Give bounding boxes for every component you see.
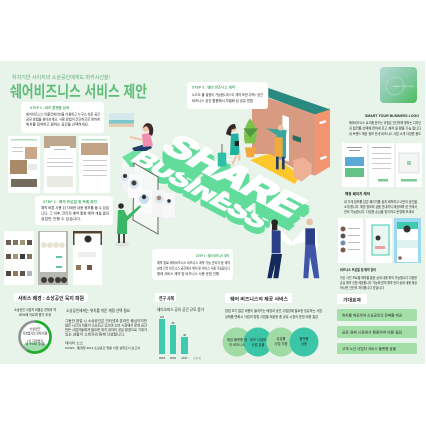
- phone screens: step 1: [8, 136, 110, 193]
- effect row 1: [337, 309, 417, 321]
- venn circles: 사업 효율: [251, 342, 265, 347]
- text block: background analysis: 많은 시간과 비용이 소요되고 있으며 소비 시장에서 운영 공간: [65, 322, 147, 328]
- venn circles: 매장 플랫폼 쉐: [227, 337, 247, 342]
- extruded wordmark: SHARE BUSINESS: BUSINESS: [126, 151, 275, 236]
- callout: step 2: [35, 196, 113, 225]
- logo card: [380, 67, 417, 103]
- callout: step 2: 니다. 그 이후, 관리자 예약 통한 예약 개설 결과: [41, 210, 110, 216]
- text: provided services description: [225, 308, 322, 319]
- bar chart: 48: [183, 334, 186, 337]
- callout: step 1: [21, 102, 104, 133]
- bar chart: 2019: [159, 356, 166, 360]
- image: beach photo: [109, 113, 134, 127]
- callout: step 1: 위치를 검색하고 원하는 공간을 선택하세요.: [26, 122, 89, 126]
- venn circles: 공유를: [276, 336, 286, 341]
- bar chart: 103: [160, 316, 165, 319]
- heading chip: expected effect: 기대효과: [343, 296, 362, 304]
- text block: background analysis: 소상공인에게는 위치를 쉬운 계정 선택 필요: [66, 308, 130, 313]
- cube under wordmark: [122, 147, 162, 200]
- donut chart: [14, 307, 56, 353]
- extruded wordmark: SHARE BUSINESS: SHARE: [154, 139, 314, 232]
- venn circles: 어 비즈니스: [229, 342, 245, 347]
- callout: step 1: 공유 방법을 찾아보세요. 사용 방법이 간단하므로 편하게: [26, 116, 100, 122]
- heading chip: case study: 연구 사례: [159, 295, 174, 302]
- illustration: traveller with suitcase: [218, 124, 240, 167]
- illustration: potted plant: [243, 118, 258, 157]
- text: shop page description: 관리 가능합니다. 다양한 손님을 맞이하고 운영해 보세요: [344, 209, 414, 214]
- illustration: shop building: [250, 88, 330, 184]
- effect row 3: 고객 노선 사업자 서비스 플랫폼 효율: [342, 346, 397, 351]
- donut chart: 자영업자의 전체 비중: [22, 330, 48, 336]
- bar chart: 2017: [181, 356, 188, 360]
- callout: step 2: 예약 버튼 사용 뒤 자세한 내용 정보를 볼 수 있습: [41, 205, 110, 210]
- subtitle: 위치기반 사이지의 소상공인에게도 마카시선을!: [12, 74, 110, 81]
- text block: background analysis: 만든 사업자들에게 필요한 위치 데이터 공유 환경으로 기대가: [65, 327, 147, 332]
- callout: step 3: 노드도 물 설정이 가능합니다! 이 계약 또한 주택 / 공간: [192, 92, 264, 97]
- bar chart: [157, 307, 204, 360]
- illustration: barista: [266, 125, 287, 169]
- effect row 1: 위치를 제공하여 소상공인의 판매를 제공: [342, 312, 403, 318]
- callout: step 1: 쉐어비즈니스 어플리케이션을 이용하고 누구나 쉬운 공간: [26, 112, 101, 116]
- callout: step 1: STEP 1 : 비즈 플랫폼 검색: [30, 105, 69, 110]
- callout: step 4: STEP 4 : 쉐어 비즈니스 계약: [196, 253, 230, 258]
- donut chart: 1인 자영업자: [27, 338, 43, 343]
- callout: step 4: [152, 249, 233, 280]
- text block: background analysis: 데이터 소스: [65, 340, 83, 345]
- heading chip: case study: [155, 293, 176, 302]
- text: shop page description: 내 가게 정보를 담은 페이지를 쉽게 제작하고 나만의 공간을: [344, 199, 417, 204]
- heading: smart your business logo: SMART YOUR BUSINESS LOGO: [365, 114, 419, 118]
- text: logo description: 과 컬러를 선택해 편하게 로고 제작 및 활용 가능 합니다: [349, 126, 422, 130]
- bar chart: 2018: [170, 356, 177, 360]
- text: shop page description: 소개 합니다. 매장 정보와 상품 안내까지 제공하며 한 곳에서: [344, 204, 417, 209]
- heading chip: service background: [14, 293, 88, 302]
- callout: step 2: STEP 2 : 예약 프로필 및 목록 확인: [43, 199, 97, 204]
- illustration: phone with profile cards: [121, 163, 175, 234]
- phone screens: shop page: [338, 218, 421, 263]
- donut chart: 약 74% 수준: [25, 341, 45, 346]
- text: profile description: [340, 275, 417, 290]
- heading: shop page: 매장 페이지 제작: [345, 191, 371, 196]
- heading chip: expected effect: [337, 294, 367, 304]
- extruded wordmark: SHARE BUSINESS: BUSINESS: [126, 153, 275, 238]
- extruded wordmark: SHARE BUSINESS: SHARE: [154, 137, 314, 230]
- phone screens: step 2: [4, 231, 102, 285]
- phone screens: logo maker: [342, 143, 422, 187]
- effect row 3: [337, 343, 417, 354]
- text: provided services description: 창업 초기 많은 비용이 들어가는 매장과 공간 사업장에 필요한 공유하는 사업: [225, 308, 322, 313]
- extruded wordmark: SHARE BUSINESS: [126, 129, 314, 238]
- callout: step 3: 비즈니스 공간 활용해서 차별화 된 공유 방법: [192, 98, 253, 103]
- extruded wordmark: SHARE BUSINESS: BUSINESS: [126, 147, 275, 232]
- extruded wordmark: SHARE BUSINESS: BUSINESS: [126, 149, 275, 234]
- heading: profile and reservation: 비즈니스 프로필 및 예약 관리: [340, 267, 376, 272]
- text block: background analysis: 있는 상황이 소비자와 함께 다양합니다.: [65, 332, 125, 336]
- callout: step 3: STEP 3 : 쉐어 비즈니스 계약: [192, 84, 236, 90]
- text: provided services description: 상태를 변화시 사업의 방법 사업을 제공한 중 공유 시장의 운영 비용 절감: [225, 314, 318, 319]
- venn circles: [222, 328, 318, 356]
- heading chip: provided services: [225, 293, 292, 303]
- text block: background analysis: KOSIS · 통계청 2019 소상공인 현황 사업 실태조사 보고서: [65, 345, 140, 350]
- venn circles: 비즈 사업화: [250, 337, 266, 342]
- callout: step 4: 형태 서비스 계약 및 비즈니스 사용 운영 진행: [157, 271, 219, 276]
- extruded wordmark: SHARE BUSINESS: SHARE: [154, 141, 314, 234]
- title: 쉐어비즈니스 서비스 제안: [10, 83, 147, 101]
- illustration: man in green with card: [115, 203, 141, 247]
- venn circles: 플랫폼: [299, 336, 309, 341]
- text: logo description: [349, 120, 422, 136]
- callout: step 4: 예약 완료 쉐어비즈니스 비즈니스 계약 가능 관리자 등 계약: [157, 260, 231, 265]
- bar chart: 단위:개: [193, 356, 201, 360]
- donut chart: 소상공인 사업자 비율은 전체의 약: [14, 307, 56, 312]
- text: profile description: 하시면 간단히 처리합니다 받습니다: [340, 285, 385, 290]
- effect row 2: 공유 경제 시장에서 활용하여 비용 절감: [342, 330, 403, 334]
- callout: step 3: [187, 82, 268, 109]
- text block: background analysis: [65, 308, 147, 350]
- bar chart: 89: [172, 322, 175, 325]
- heading chip: service background: 서비스 배경 : 소상공인 육지 파원: [18, 295, 84, 302]
- heading chip: provided services: 쉐어 비즈니스의 제공 서비스: [230, 296, 288, 302]
- callout: step 2: 상담만 진행 수 있습니다.: [41, 216, 81, 221]
- bar chart: 쉐어오피스 공유 공간 규모 증가: [157, 307, 204, 312]
- extruded wordmark: SHARE BUSINESS: SHARE: [154, 135, 314, 228]
- panel: background: [0, 61, 425, 364]
- text: shop page description: [344, 199, 417, 214]
- extruded wordmark: SHARE BUSINESS: SHARE: [154, 129, 314, 222]
- donut chart: 80%에 이르며 증가 추세: [19, 312, 51, 317]
- text block: background analysis: 그동안 창업 시 소상공인은 인터넷과 온라인 중심이지만: [65, 318, 147, 323]
- donut chart: 소상공인: [30, 326, 41, 331]
- effect row 2: [337, 326, 417, 338]
- venn circles: 사업 지원: [274, 341, 288, 346]
- venn circles: 상품: [301, 341, 307, 346]
- callout: step 4: 상태 관리 비즈니스 공간에서 위치 및 서비스 사용 가능합니다: [157, 266, 231, 270]
- illustration: woman sitting with phone: [130, 123, 153, 151]
- illustration: business handshake: [267, 219, 319, 278]
- logo card: SMART YOUR LOGO: [393, 85, 414, 88]
